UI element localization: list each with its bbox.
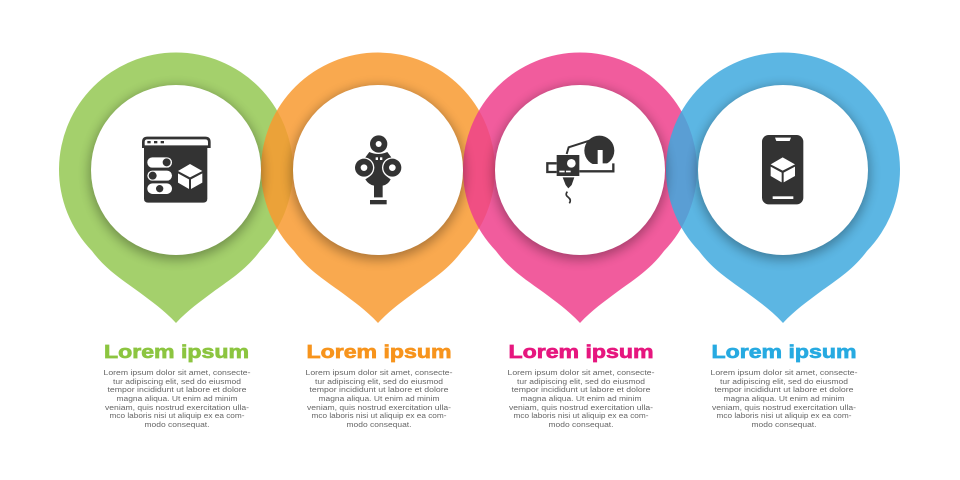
circle shadows (89, 86, 870, 260)
text block: orange: tur adipiscing elit, sed do eiusmod (315, 377, 443, 386)
pin: pink (463, 53, 697, 323)
text block: blue: modo consequat. (752, 420, 816, 429)
text block: orange: mco laboris nisi ut aliquip ex ea com- (312, 411, 447, 420)
text block: orange (306, 341, 453, 429)
text block: orange: modo consequat. (346, 420, 412, 429)
text block: pink: Lorem ipsum (508, 341, 654, 362)
text block: green: Lorem ipsum (104, 341, 249, 362)
icon: smartphone with cube (762, 135, 803, 204)
text block: pink (508, 341, 655, 429)
text block: green: tempor incididunt ut labore et dolore (108, 385, 246, 394)
text block: blue (710, 341, 858, 429)
icon: three-disc device on a stand (354, 135, 403, 204)
pin: green (59, 53, 293, 323)
text block: green (104, 341, 251, 429)
text block: blue: magna aliqua. Ut enim ad minim (724, 394, 844, 403)
text block: orange: Lorem ipsum (306, 341, 452, 362)
text block: green: magna aliqua. Ut enim ad minim (116, 394, 238, 403)
text block: pink: mco laboris nisi ut aliquip ex ea com- (514, 411, 649, 420)
pin: orange (261, 53, 495, 323)
text block: blue: Lorem ipsum (712, 341, 856, 362)
text block: green: tur adipiscing elit, sed do eiusmod (113, 377, 241, 386)
text block: pink: tempor incididunt ut labore et dolore (512, 385, 650, 394)
text block: orange: tempor incididunt ut labore et dolore (310, 385, 448, 394)
text block: green: modo consequat. (144, 420, 210, 429)
text block: pink: veniam, quis nostrud exercitation ulla- (509, 403, 654, 412)
icon: 3D printer extruder with filament spool (547, 136, 614, 203)
pin: blue (666, 53, 900, 323)
text block: green: veniam, quis nostrud exercitation ulla- (105, 403, 250, 412)
text block: orange: veniam, quis nostrud exercitation ulla- (307, 403, 452, 412)
text block: green: Lorem ipsum dolor sit amet, consecte- (104, 368, 251, 377)
text block: orange: magna aliqua. Ut enim ad minim (318, 394, 440, 403)
white circles (91, 85, 868, 255)
text block: blue: veniam, quis nostrud exercitation ulla- (712, 403, 857, 412)
text block: blue: mco laboris nisi ut aliquip ex ea com- (716, 411, 852, 420)
text block: pink: Lorem ipsum dolor sit amet, consecte- (508, 368, 655, 377)
text block: blue: tur adipiscing elit, sed do eiusmod (720, 377, 848, 386)
text block: orange: Lorem ipsum dolor sit amet, consecte- (306, 368, 453, 377)
text block: pink: magna aliqua. Ut enim ad minim (520, 394, 642, 403)
text block: pink: tur adipiscing elit, sed do eiusmod (517, 377, 645, 386)
text block: pink: modo consequat. (548, 420, 614, 429)
text block: blue: tempor incididunt ut labore et dolore (714, 385, 854, 394)
text block: green: mco laboris nisi ut aliquip ex ea com- (110, 411, 245, 420)
icon: browser window with toggles and cube (143, 138, 209, 203)
text block: blue: Lorem ipsum dolor sit amet, consecte- (710, 368, 858, 377)
